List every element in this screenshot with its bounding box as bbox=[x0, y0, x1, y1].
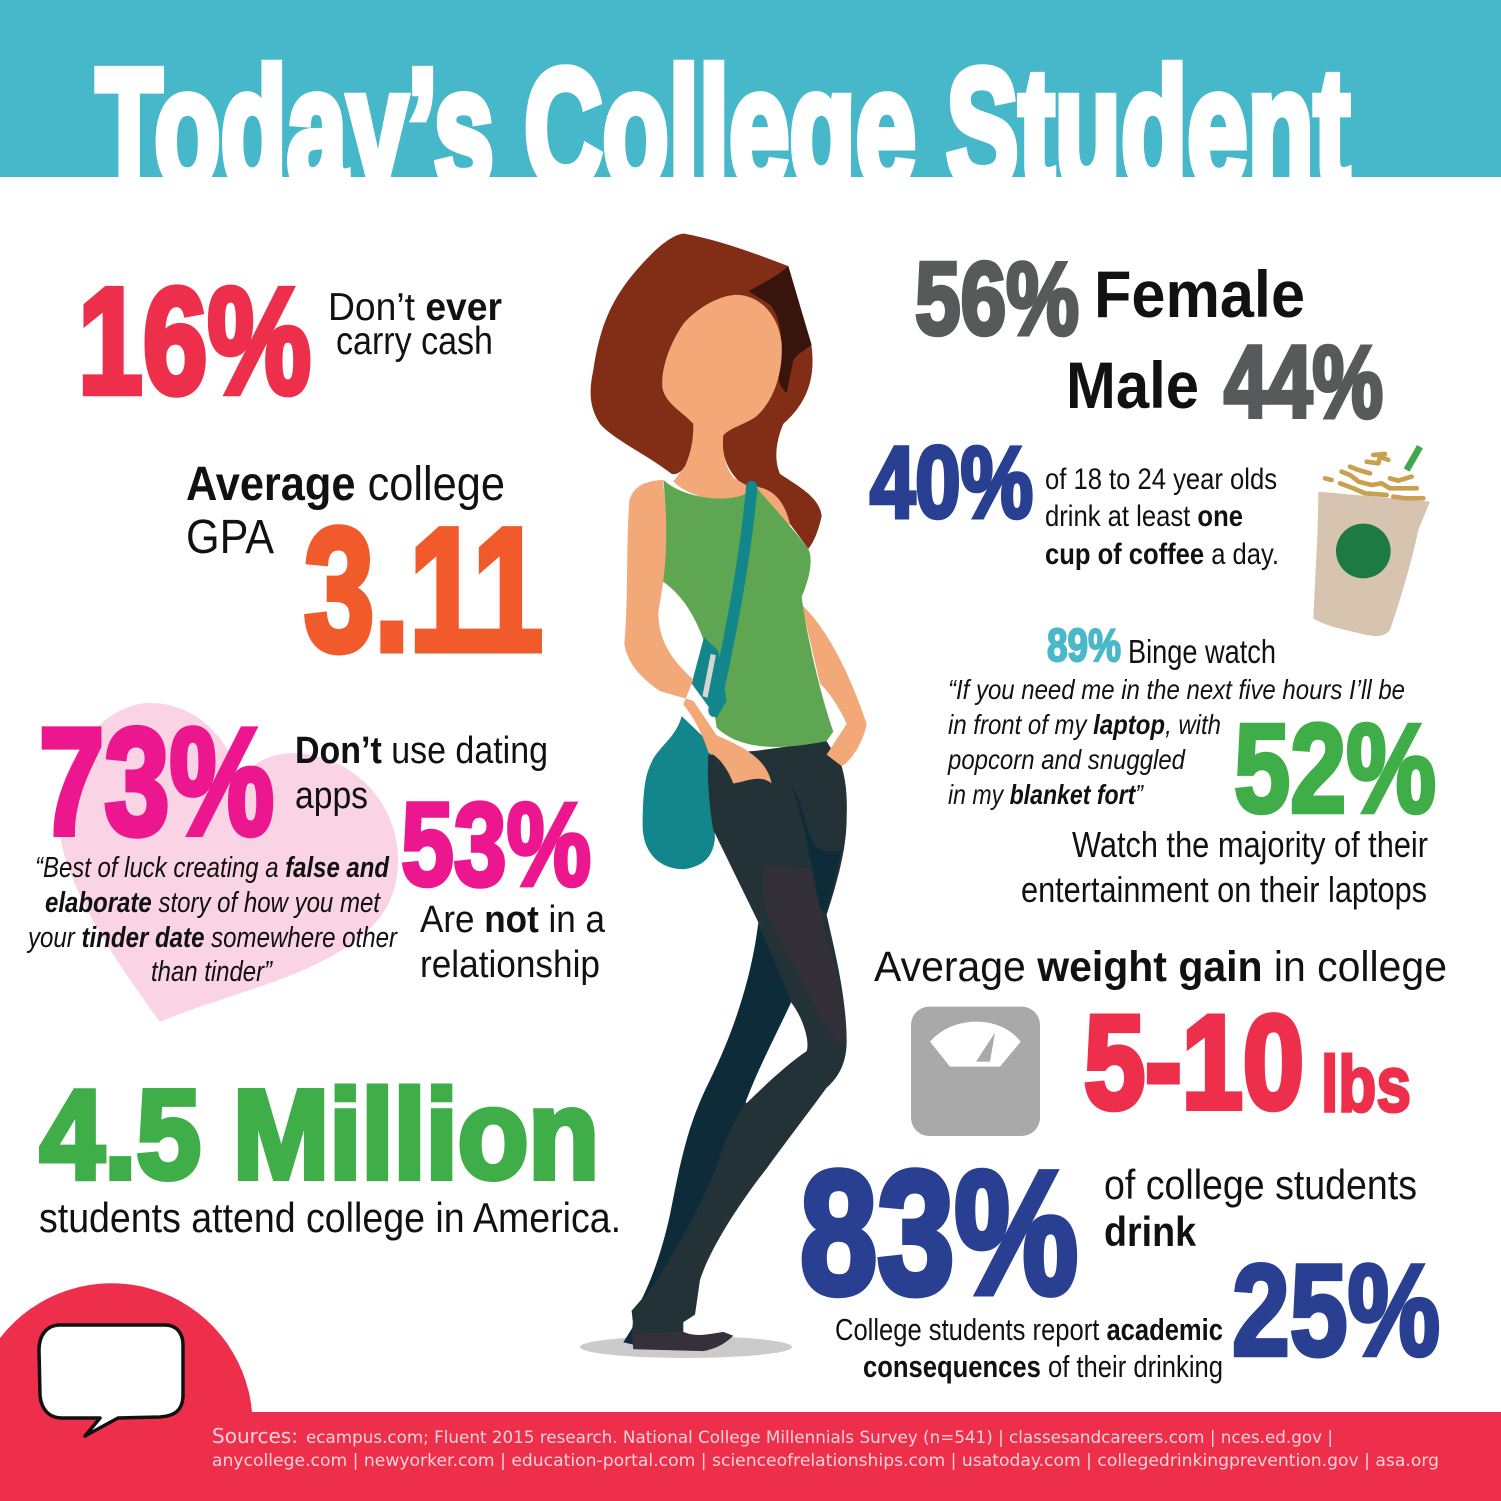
stat: 25% academic consequences: consequences of their drinking bbox=[863, 1349, 1223, 1384]
stat: average GPA: Average college bbox=[186, 458, 505, 511]
stat: 16% carry no cash: 16% bbox=[78, 256, 311, 425]
sources text: anycollege.com | newyorker.com | education-portal.com | scienceofrelationships.com | usatoday.com | collegedrinkingprevention.gov | asa.org bbox=[212, 1451, 1439, 1471]
laptop quote: popcorn and snuggled bbox=[947, 744, 1186, 775]
stat: 73% no dating apps: 73% bbox=[39, 697, 274, 867]
stat: 53% not in a relationship: 53% bbox=[401, 779, 591, 911]
stat: 73% no dating apps: Don’t use dating bbox=[295, 730, 548, 772]
stat: 4.5 million students: 4.5 Million bbox=[40, 1064, 599, 1205]
stat: 52% laptops bbox=[1021, 698, 1436, 910]
stat: 44% male bbox=[1066, 325, 1383, 439]
sources text: ecampus.com; Fluent 2015 research. National College Millennials Survey (n=541) | classesandcareers.com | nces.ed.gov | bbox=[306, 1428, 1333, 1448]
icon: coffee cup bbox=[1313, 447, 1430, 636]
laptop quote: “If you need me in the next five hours I’ll be bbox=[948, 674, 1405, 705]
stat: 53% not in a relationship bbox=[401, 779, 606, 986]
tinder quote: “Best of luck creating a false and bbox=[35, 852, 390, 884]
stat: weight gain heading: Average weight gain in college bbox=[874, 943, 1447, 991]
stat: 56% female: Female bbox=[1094, 257, 1305, 331]
icon: speech bubble bbox=[39, 1325, 183, 1436]
icon: scale bbox=[911, 1007, 1040, 1136]
figure upper body bbox=[591, 233, 867, 783]
stat: 83% drink: of college students bbox=[1104, 1161, 1417, 1208]
tinder quote bbox=[26, 852, 398, 988]
stat: 89% binge watch bbox=[1047, 619, 1276, 671]
stat: 56% female bbox=[915, 241, 1305, 356]
stat: 73% no dating apps bbox=[39, 697, 548, 867]
stat: 83% drink: drink bbox=[1104, 1208, 1197, 1255]
stat: 25% academic consequences bbox=[835, 1237, 1440, 1384]
laptop quote: in front of my laptop, with bbox=[948, 709, 1221, 740]
stat: 83% drink bbox=[800, 1136, 1417, 1331]
figure shadow bbox=[580, 1336, 792, 1358]
stat: 5-10 lbs: lbs bbox=[1321, 1039, 1411, 1128]
stat: 83% drink: 83% bbox=[800, 1136, 1078, 1331]
tinder quote: than tinder” bbox=[151, 956, 273, 988]
stat: 44% male: 44% bbox=[1224, 325, 1383, 439]
stat: 53% not in a relationship: relationship bbox=[420, 944, 600, 986]
stat: 73% no dating apps: apps bbox=[295, 775, 368, 817]
stat: average GPA: 3.11 bbox=[304, 493, 543, 688]
stat: 4.5 million students: students attend college in America. bbox=[39, 1194, 621, 1241]
stat: 52% laptops: 52% bbox=[1234, 698, 1436, 839]
stat: 40% coffee: drink at least one bbox=[1045, 500, 1243, 533]
stat: average GPA: GPA bbox=[186, 511, 274, 564]
stat: 16% carry no cash: Don’t ever bbox=[328, 286, 502, 329]
sources text bbox=[212, 1424, 1439, 1471]
stat: 40% coffee: 40% bbox=[870, 427, 1033, 539]
stat: 40% coffee: cup of coffee a day. bbox=[1045, 538, 1279, 571]
tinder quote: elaborate story of how you met bbox=[45, 887, 382, 919]
stat: 25% academic consequences: College students report academic bbox=[835, 1312, 1223, 1347]
stat: 52% laptops: Watch the majority of their bbox=[1072, 824, 1428, 865]
figure lower body bbox=[623, 716, 847, 1351]
stat: average GPA bbox=[186, 458, 543, 688]
stat: 89% binge watch: 89% bbox=[1047, 619, 1121, 671]
stat: 16% carry no cash: carry cash bbox=[336, 320, 493, 363]
heart background bbox=[59, 703, 398, 1022]
sources text: Sources: bbox=[212, 1424, 298, 1448]
stat: 40% coffee bbox=[870, 427, 1279, 571]
tinder quote: your tinder date somewhere other bbox=[26, 922, 398, 954]
stat: 56% female: 56% bbox=[915, 241, 1079, 356]
stat: 89% binge watch: Binge watch bbox=[1128, 633, 1276, 670]
footer band bbox=[0, 1283, 1501, 1501]
laptop quote: in my blanket fort” bbox=[948, 779, 1144, 810]
stat: 53% not in a relationship: Are not in a bbox=[420, 899, 606, 941]
stat: 40% coffee: of 18 to 24 year olds bbox=[1045, 463, 1277, 496]
stat: 25% academic consequences: 25% bbox=[1232, 1237, 1440, 1383]
figure: student bbox=[580, 233, 867, 1358]
stat: 52% laptops: entertainment on their laptops bbox=[1021, 869, 1427, 910]
stat: 44% male: Male bbox=[1066, 348, 1199, 422]
header band bbox=[0, 0, 1501, 177]
laptop quote bbox=[947, 674, 1405, 810]
stat: 5-10 lbs: 5-10 bbox=[1084, 989, 1304, 1137]
